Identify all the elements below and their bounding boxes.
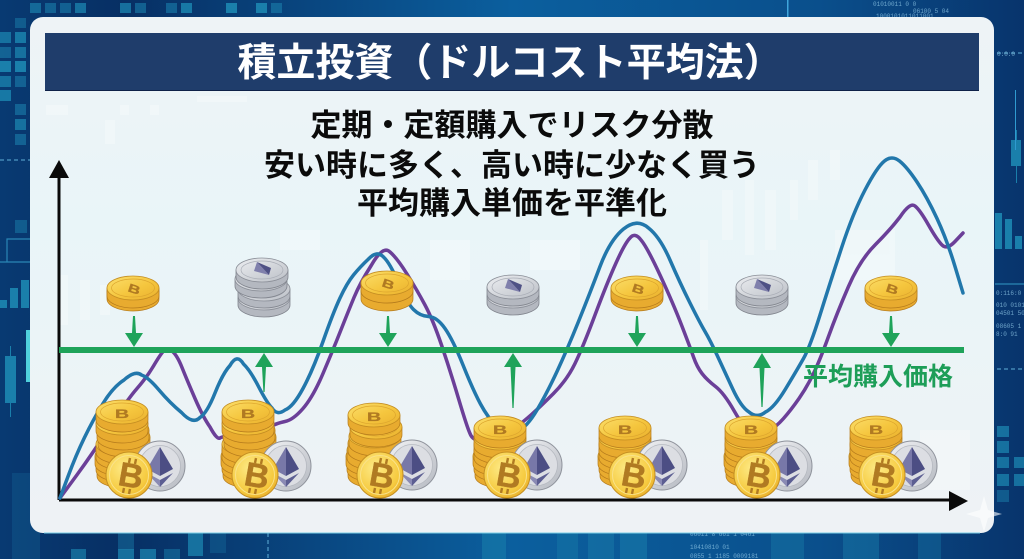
subtitle text: 平均購入単価を平準化	[357, 186, 667, 221]
price line: blue	[60, 158, 963, 498]
label: average purchase price: 平均購入価格	[803, 363, 953, 391]
subtitle text	[264, 108, 760, 221]
background: 04501 50	[996, 310, 1024, 317]
subtitle text: 定期・定額購入でリスク分散	[310, 108, 714, 143]
icon: bitcoin coin 4	[865, 276, 917, 311]
coin pile 4: B	[493, 424, 507, 437]
background: 01010011 0 0	[873, 1, 917, 8]
price line: purple	[60, 205, 963, 498]
coin pile 1: B	[115, 408, 129, 421]
background: 8:0 91	[996, 331, 1018, 338]
icon: bitcoin coin 3	[611, 276, 663, 311]
title bar	[45, 33, 979, 91]
coin pile 5: B	[618, 424, 632, 437]
background: 0:0:0	[997, 51, 1015, 58]
coin pile 2: B	[241, 408, 255, 421]
background: 010 0101	[996, 302, 1024, 309]
coin pile 3: B	[367, 411, 381, 424]
icon: ethereum stack 1	[235, 258, 290, 317]
arrows: up to average	[255, 353, 771, 408]
background: 08605 1	[996, 323, 1022, 330]
coin pile 6	[724, 416, 812, 498]
icon: bitcoin coins 2	[361, 271, 413, 311]
coin pile 7: B	[869, 424, 883, 437]
coin pile 5: B	[619, 455, 649, 497]
background: 06011 8 661 1 0461	[690, 531, 755, 538]
icon: bitcoin coins 2: B	[380, 277, 396, 293]
coin pile 5	[598, 416, 687, 498]
coin pile 7	[849, 416, 937, 498]
coin pile 4	[473, 416, 562, 498]
average price line	[59, 347, 964, 353]
background: 1000101011011001	[876, 13, 934, 20]
background: 06100 5 04	[913, 8, 949, 15]
coin pile 3: B	[367, 455, 397, 497]
coin pile 4: B	[494, 455, 524, 497]
icon: ethereum stack 2	[487, 275, 539, 315]
coin pile 6: B	[744, 424, 758, 437]
coin pile 1	[95, 400, 185, 498]
icon: ethereum stack 3	[736, 275, 788, 315]
coin pile 6: B	[744, 455, 774, 497]
icon: bitcoin coin 1	[107, 276, 159, 311]
arrows: down to average	[125, 316, 900, 347]
coin pile 3	[346, 403, 437, 498]
coin pile 7: B	[869, 455, 899, 497]
icon: bitcoin coin 3: B	[630, 282, 646, 298]
coin pile 1: B	[116, 455, 146, 497]
background: 10410810 01	[690, 544, 730, 551]
chart axes	[49, 160, 968, 511]
title bar: 積立投資（ドルコスト平均法）	[237, 42, 783, 85]
subtitle text: 安い時に多く、高い時に少なく買う	[264, 148, 760, 183]
background: 0:116:0	[996, 290, 1022, 297]
coin pile 2: B	[242, 455, 272, 497]
icon: bitcoin coin 4: B	[884, 282, 900, 298]
coin pile 2	[221, 400, 311, 498]
icon: bitcoin coin 1: B	[126, 282, 142, 298]
